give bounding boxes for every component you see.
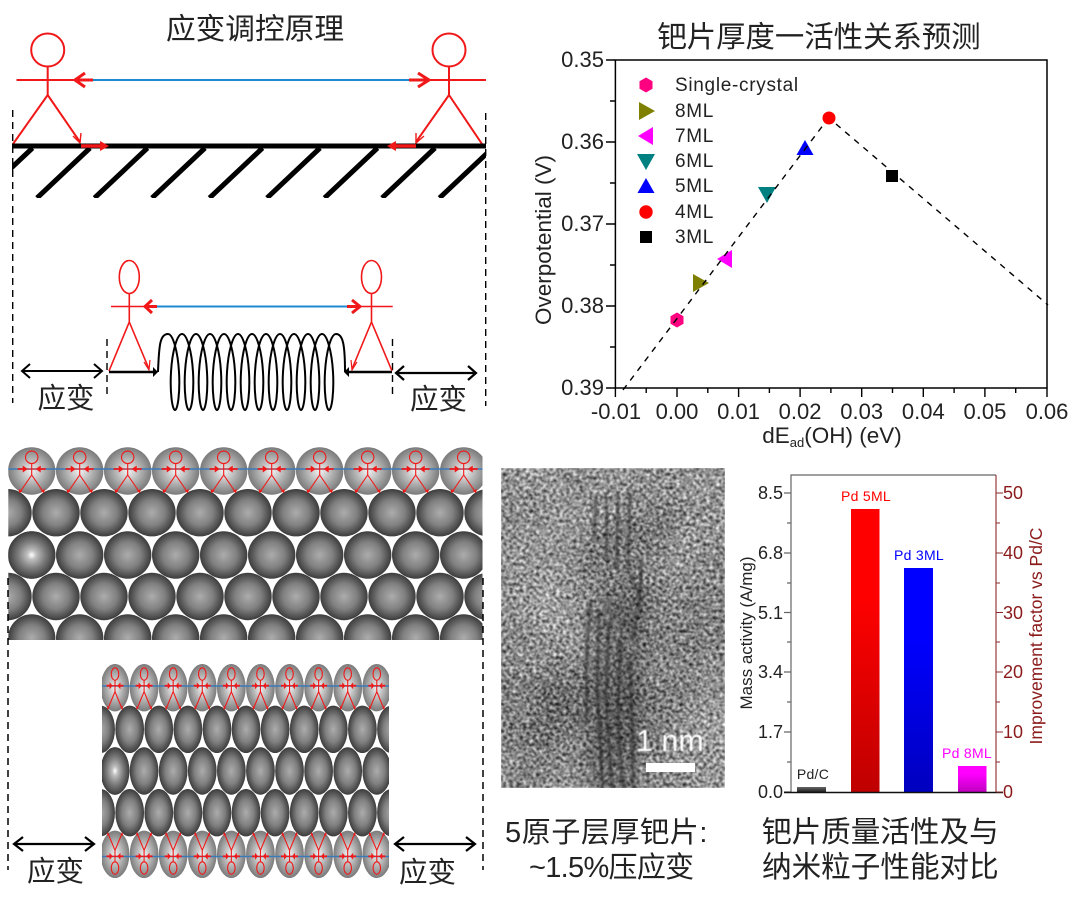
rigid substrate with hatching — [0, 146, 492, 198]
legend: 6ML — [675, 151, 714, 172]
left and top axes — [784, 475, 996, 792]
panel: strain principle diagram — [0, 13, 492, 416]
x tick labels: 0.02 — [779, 399, 822, 424]
panel: atomic lattice compressed — [102, 664, 389, 878]
bar labels: Pd 3ML — [894, 547, 944, 563]
blue bond between compressed figures — [157, 306, 347, 308]
legend: 5ML — [675, 176, 714, 197]
plot frame and ticks — [606, 60, 1047, 397]
y tick labels: 0.35 — [561, 47, 604, 72]
noisy micrograph background — [501, 468, 725, 788]
baseline — [784, 792, 1003, 794]
y tick labels: 0.38 — [561, 293, 604, 318]
lattice double arrow left — [14, 837, 94, 851]
label: strain left: 应变 — [37, 383, 95, 415]
dashed guide lines — [13, 110, 486, 406]
scale label: 1 nm — [636, 724, 704, 758]
right tick labels — [1003, 483, 1023, 802]
caption: TEM thickness strain — [505, 816, 708, 884]
surface stick figures — [18, 451, 478, 493]
legend: 3ML — [675, 227, 714, 248]
x tick labels: 0.06 — [1026, 399, 1068, 424]
left axis title: Mass activity (A/mg) — [737, 556, 756, 710]
surface bond line — [8, 468, 483, 470]
blue bond between top figures — [93, 79, 409, 81]
label: lattice strain right: 应变 — [399, 857, 456, 889]
lattice double arrow right — [395, 837, 475, 851]
y tick labels: 0.37 — [561, 211, 604, 236]
right stick figure on substrate — [409, 34, 486, 144]
legend: 7ML — [675, 126, 714, 147]
right tick labels: 30 — [1003, 603, 1023, 623]
left tick labels — [758, 483, 783, 802]
y tick labels: 0.39 — [561, 375, 604, 400]
right tick labels: 50 — [1003, 483, 1023, 503]
left tick labels: 0.0 — [758, 782, 783, 802]
double arrow left — [22, 364, 102, 378]
top compressed figures — [107, 668, 385, 710]
compressed atom rows — [102, 664, 389, 878]
panel: TEM micrograph — [501, 468, 725, 800]
caption: TEM thickness strain: ~1.5%压应变 — [529, 851, 693, 884]
left tick labels: 3.4 — [758, 662, 783, 682]
left tick labels: 8.5 — [758, 483, 783, 503]
x tick labels: 0.04 — [902, 399, 945, 424]
legend: 4ML — [675, 202, 714, 223]
x tick labels — [591, 399, 1068, 424]
right tick labels: 20 — [1003, 662, 1023, 682]
left tick labels: 5.1 — [758, 603, 783, 623]
scale bar — [646, 763, 695, 772]
bright haze — [543, 480, 587, 580]
right tick labels: 0 — [1003, 782, 1013, 802]
spring substrate — [158, 334, 345, 410]
left tick labels: 1.7 — [758, 722, 783, 742]
panel: thickness activity volcano chart — [531, 21, 1068, 450]
bar labels: Pd/C — [797, 766, 829, 782]
x axis title: (OH) (eV) — [804, 423, 902, 448]
foot arrows on substrate — [81, 141, 416, 151]
bar labels — [797, 488, 992, 782]
right tick labels: 40 — [1003, 543, 1023, 563]
dark band — [585, 600, 640, 800]
label: strain right: 应变 — [410, 384, 467, 416]
heading: thickness activity prediction: 钯片厚度一活性关系预测 — [657, 21, 981, 54]
y tick labels: 0.36 — [561, 129, 604, 154]
x tick labels: 0.05 — [963, 399, 1006, 424]
atomic layer fringes — [586, 492, 642, 790]
caption: mass activity comparison — [762, 816, 999, 884]
x tick labels: -0.01 — [591, 399, 641, 424]
panel: atomic lattice unstrained — [8, 447, 482, 640]
feet lines with arrows — [109, 367, 392, 377]
heading: strain principle: 应变调控原理 — [166, 13, 344, 46]
compressed left stick figure — [109, 260, 157, 371]
x tick labels: 0.03 — [840, 399, 883, 424]
y axis title: Overpotential (V) — [531, 155, 556, 325]
caption: mass activity comparison: 钯片质量活性及与 — [762, 816, 999, 849]
legend — [637, 75, 799, 248]
caption: TEM thickness strain: 5原子层厚钯片: — [505, 816, 708, 849]
x tick labels: 0.01 — [717, 399, 760, 424]
label: lattice strain left: 应变 — [27, 856, 84, 888]
y tick labels — [561, 47, 604, 400]
caption: mass activity comparison: 纳米粒子性能对比 — [762, 851, 999, 884]
bars — [797, 509, 986, 792]
x axis title: dE — [762, 423, 790, 448]
bottom compressed figures — [107, 832, 385, 874]
double arrow right — [396, 366, 476, 380]
4ML data marker — [822, 112, 836, 124]
legend: Single-crystal — [675, 75, 799, 96]
legend: 8ML — [675, 101, 714, 122]
right tick labels: 10 — [1003, 722, 1023, 742]
data markers — [670, 140, 898, 328]
x tick labels: 0.00 — [656, 399, 698, 424]
compressed bond lines — [102, 686, 389, 856]
x axis title: ad — [790, 435, 804, 450]
left tick labels: 6.8 — [758, 543, 783, 563]
dashed volcano line — [623, 124, 1048, 390]
bar labels: Pd 8ML — [942, 745, 992, 761]
bar labels: Pd 5ML — [841, 488, 891, 504]
atom rows — [8, 447, 482, 640]
right axis — [996, 475, 1003, 792]
right axis title: Improvement factor vs Pd/C — [1026, 528, 1046, 744]
dashed guide lines lattice — [8, 578, 483, 870]
panel: mass activity bar chart — [737, 475, 1046, 802]
left stick figure on substrate — [13, 34, 93, 144]
compressed right stick figure — [347, 260, 393, 371]
